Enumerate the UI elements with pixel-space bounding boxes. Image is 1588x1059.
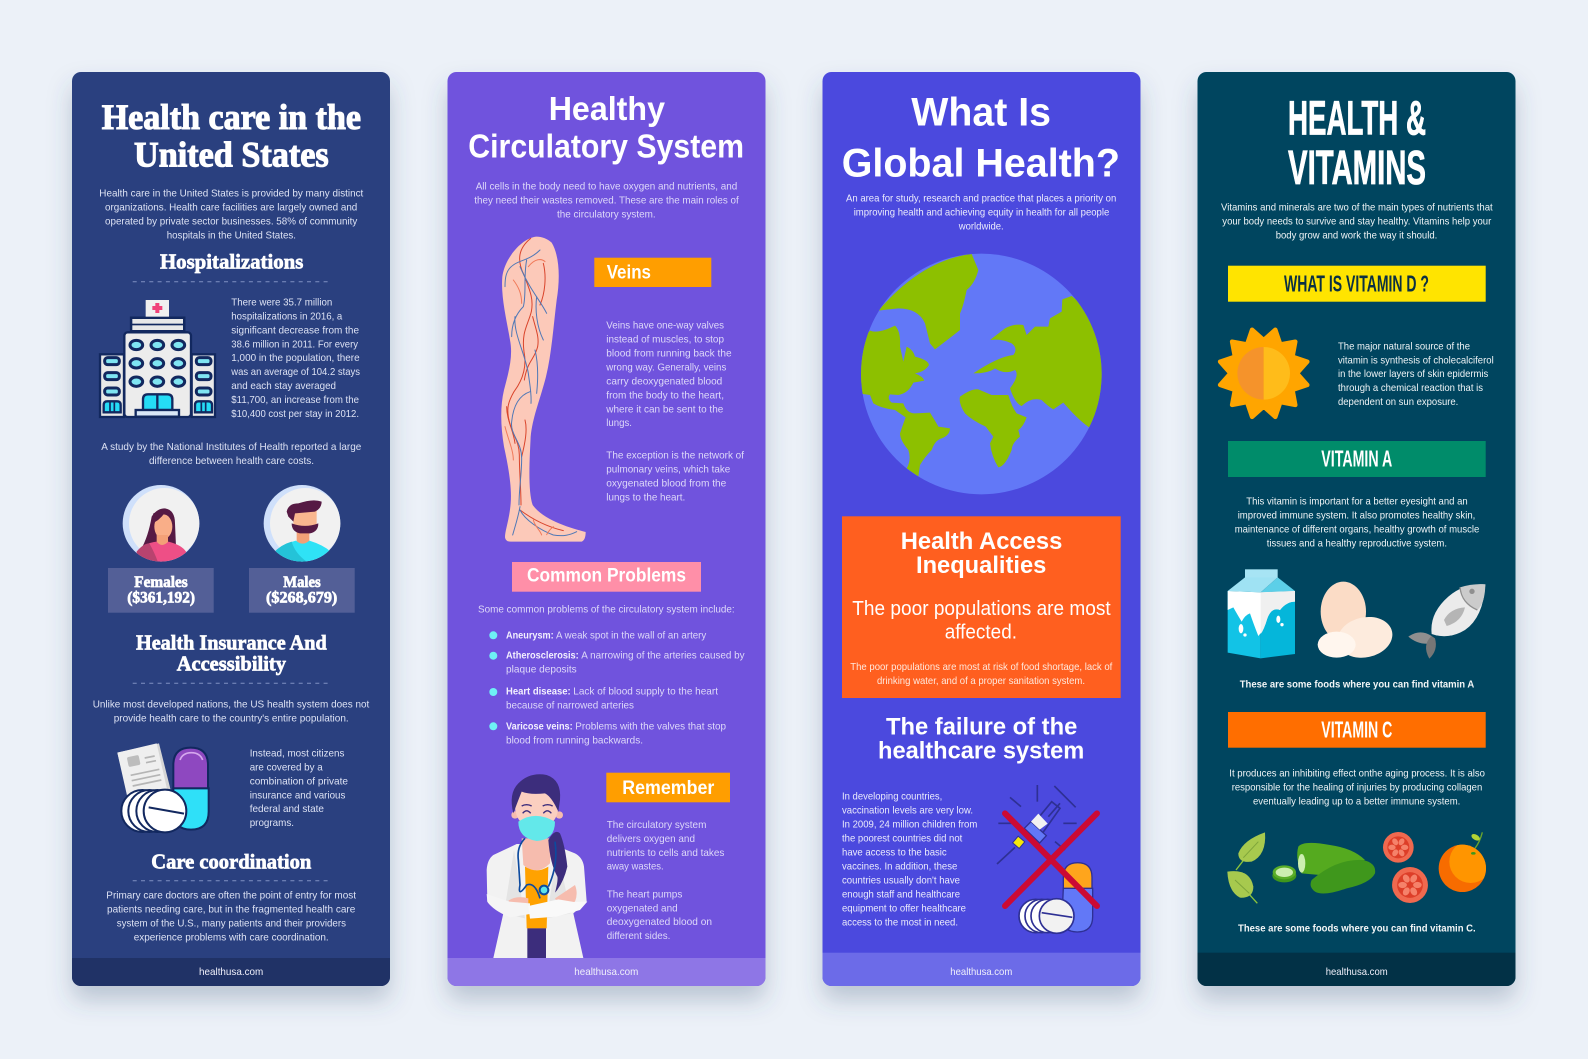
vitamin D text: dependent on sun exposure. [1338,396,1458,408]
veins text: lungs to the heart. [606,491,685,503]
stat box: females [108,568,214,613]
bullet list: blood from running backwards. [506,734,643,746]
icon: tomato slices [1383,832,1428,903]
intro text: hospitals in the United States. [167,230,296,242]
healthcare failure text: equipment to offer healthcare [842,902,966,914]
label: vitamin A [1228,441,1486,477]
icon: orange [1438,832,1486,892]
intro text: All cells in the body need to have oxygen and nutrients, and [476,181,737,193]
veins text: pulmonary veins, which take [606,463,730,475]
callout: health access inequalities: Inequalities [916,552,1046,579]
healthcare failure text: vaccines. In addition, these [842,860,957,872]
bullet list: Heart disease: [506,685,571,697]
insurance side text [250,747,348,829]
title: Circulatory System [468,128,744,165]
vitamin A text: maintenance of different organs, healthy growth of muscle [1235,523,1479,535]
vitamin A text [1235,495,1479,549]
remember text [607,819,724,942]
icon: eggs [1318,582,1396,663]
remember text: away wastes. [607,861,664,873]
care coordination text: system of the U.S., many patients and their providers [117,917,346,929]
panel footer bar [448,958,766,986]
insurance side text: combination of private [250,775,348,787]
veins text: oxygenated blood from the [606,477,726,489]
callout: health access inequalities: The poor populations are most at risk of food shortage, lack of [850,661,1112,673]
intro text: they need their wastes removed. These are the main roles of [474,195,739,207]
title: Global Health? [842,142,1120,186]
callout: health access inequalities: affected. [945,622,1017,644]
bullet list: A weak spot in the wall of an artery [556,630,707,642]
caption: vitamin C foods: These are some foods where you can find vitamin C. [1238,922,1476,934]
insurance side text: insurance and various [250,789,345,801]
icon: female avatar [123,485,200,563]
intro text: your body needs to survive and stay healthy. Vitamins help your [1222,215,1492,227]
illustration: globe [858,254,1108,494]
care coordination text [106,889,356,943]
label: what is vitamin D [1228,266,1486,302]
icon: crossed-out syringe and pills [997,785,1097,933]
title: Healthy [549,90,666,127]
vitamin A text: improved immune system. It also promotes healthy skin, [1238,509,1475,521]
insurance side text: federal and state [250,803,324,815]
illustration: leg with veins [501,237,586,542]
remember text: delivers oxygen and [607,833,695,845]
healthcare failure text: countries usually don't have [842,874,960,886]
heading: insurance: Health Insurance And [136,630,327,654]
title: What Is [911,91,1051,135]
stat box: males: Males [283,574,321,591]
heading: failure of the healthcare system: The failure of the [886,713,1077,740]
title: VITAMINS [1288,142,1426,195]
panel: health care in the United States [72,72,390,986]
callout: health access inequalities [842,516,1121,698]
intro text: organizations. Health care facilities are largely owned and [105,202,357,214]
stat box: males: ($268,679) [266,590,337,607]
vitamin C text: eventually leading up to a better immune system. [1253,795,1460,807]
label: what is vitamin D: WHAT IS VITAMIN D ? [1284,271,1429,297]
label: remember: Remember [622,778,715,799]
veins text: The exception is the network of [606,449,744,461]
title: Health care in the [102,97,361,137]
study text [101,441,361,467]
stat box: females: ($361,192) [127,590,195,607]
icon: male avatar [264,485,341,563]
veins text: blood from running back the [606,348,732,360]
heading: insurance [136,630,327,676]
panel: health and vitamins [1198,72,1516,987]
hospitalization text: significant decrease from the [231,324,359,336]
hospitalization text: 1,000 in the population, there [231,352,360,364]
veins text: instead of muscles, to stop [606,334,724,346]
label: vitamin A: VITAMIN A [1321,446,1392,472]
healthcare failure text: access to the most in need. [842,916,958,928]
bullet list: Varicose veins: [506,720,573,732]
bullet list: Lack of blood supply to the heart [573,685,718,697]
icon: milk carton [1228,569,1295,658]
icon: document, capsule and tablets [117,743,209,832]
intro text: body grow and work the way it should. [1276,229,1437,241]
title [1288,92,1426,195]
label: common problems [512,562,701,592]
study text: A study by the National Institutes of Health reported a large [101,441,361,453]
caption: vitamin A foods: These are some foods where you can find vitamin A [1240,679,1475,691]
vitamin C text: responsible for the healing of injuries by producing collagen [1232,781,1482,793]
label: veins [594,258,711,287]
intro text: Vitamins and minerals are two of the main types of nutrients that [1221,201,1493,213]
panel background [822,72,1140,986]
intro text: operated by private sector businesses. 58% of community [105,216,358,228]
remember text: The heart pumps [607,888,682,900]
vitamin D text [1338,340,1494,408]
study text: difference between health care costs. [149,455,314,467]
intro text: An area for study, research and practice that places a priority on [846,193,1116,205]
label: remember [606,773,730,802]
intro text [1221,201,1493,241]
hospitalization text: was an average of 104.2 stays [230,366,360,378]
remember text: deoxygenated blood on [607,916,712,928]
common problems lead-in: Some common problems of the circulatory system include: [478,604,735,616]
title [842,91,1120,186]
vitamin D text: through a chemical reaction that is [1338,382,1483,394]
label: vitamin C: VITAMIN C [1321,716,1392,742]
bullet list: Aneurysm: [506,630,554,642]
callout: health access inequalities: drinking water, and of a proper sanitation system. [877,675,1085,687]
heading: insurance: Accessibility [177,652,286,676]
panel footer bar: healthusa.com [574,966,639,978]
healthcare failure text: In developing countries, [842,791,942,803]
bullet list [489,630,745,746]
icon: cucumbers [1272,843,1375,894]
heading: failure of the healthcare system: healthcare system [878,737,1084,764]
icon: spinach leaves [1227,832,1265,903]
vitamin C text [1229,767,1485,807]
vitamin C text: It produces an inhibiting effect onthe aging process. It is also [1229,767,1485,779]
title [102,97,361,175]
panel background [448,72,766,986]
stat box: males [249,568,355,613]
stat box: females: Females [134,574,188,591]
vitamin A text: tissues and a healthy reproductive system. [1267,537,1447,549]
veins text: where it can be sent to the [605,403,723,415]
veins text: lungs. [606,417,632,429]
intro text: improving health and achieving equity in health for all people [854,207,1109,219]
label: common problems: Common Problems [527,566,686,587]
care coordination text: Primary care doctors are often the point of entry for most [106,889,356,901]
healthcare failure text: In 2009, 24 million children from [842,819,978,831]
panel: what is global health [822,72,1140,987]
remember text: The circulatory system [607,819,707,831]
intro text: Health care in the United States is provided by many distinct [99,188,363,200]
hospitalization text: hospitalizations in 2016, a [231,310,342,322]
panel: healthy circulatory system [448,72,766,986]
icon: sun [1220,330,1307,417]
panel footer bar [72,958,390,986]
heading: care coordination: Care coordination [151,850,312,874]
bullet list: because of narrowed arteries [506,699,634,711]
healthcare failure text: the poorest countries did not [842,833,962,845]
intro text: worldwide. [958,221,1004,233]
bullet list: plaque deposits [506,664,577,676]
hospitalization text: $10,400 cost per stay in 2012. [231,408,359,420]
vitamin A text: This vitamin is important for a better eyesight and an [1246,495,1468,507]
insurance side text: programs. [250,817,294,829]
bullet list: Atherosclerosis: [506,650,579,662]
panel footer bar: healthusa.com [950,966,1013,978]
callout: health access inequalities: The poor populations are most [852,598,1111,620]
healthcare failure text: have access to the basic [842,847,947,859]
hospitalization text: There were 35.7 million [231,296,332,308]
icon: hospital building [100,300,215,417]
title: HEALTH & [1288,92,1426,145]
healthcare failure text: vaccination levels are very low. [842,805,973,817]
icon: fish [1408,584,1485,659]
panel background [1198,72,1516,986]
panel footer bar: healthusa.com [199,966,264,978]
insurance intro text [93,698,369,724]
bullet list: Problems with the valves that stop [575,720,726,732]
intro text [474,181,739,221]
remember text: different sides. [607,930,670,942]
healthcare failure text [842,791,978,928]
vitamin D text: in the lower layers of skin epidermis [1338,368,1488,380]
callout: health access inequalities: Health Access [901,528,1062,555]
care coordination text: experience problems with care coordination. [134,931,329,943]
panel footer bar [1198,953,1516,987]
label: vitamin C [1228,712,1486,748]
hospitalization text: $11,700, an increase from the [231,394,359,406]
panel background [72,72,390,986]
title: United States [134,135,329,175]
insurance intro text: provide health care to the country's entire population. [114,712,349,724]
intro text [846,193,1116,233]
bullet list: A narrowing of the arteries caused by [581,650,745,662]
intro text: the circulatory system. [557,209,656,221]
heading: failure of the healthcare system [878,713,1084,764]
panel footer bar: healthusa.com [1326,966,1388,978]
veins text: wrong way. Generally, veins [605,362,726,374]
illustration: doctor with mask [487,774,587,958]
title [468,90,744,165]
hospitalization text: and each stay averaged [231,380,336,392]
heading: hospitalizations: Hospitalizations [160,250,303,274]
vitamin D text: The major natural source of the [1338,340,1470,352]
remember text: oxygenated and [607,902,678,914]
panel footer bar [822,953,1140,987]
insurance side text: Instead, most citizens [250,747,344,759]
hospitalization text [230,296,360,420]
healthcare failure text: enough staff and healthcare [842,888,960,900]
vitamin D text: vitamin is synthesis of cholecalciferol [1338,354,1494,366]
insurance side text: are covered by a [250,761,323,773]
hospitalization text: 38.6 million in 2011. For every [231,338,359,350]
intro text [99,188,363,242]
veins text [605,320,744,503]
care coordination text: patients needing care, but in the fragmented health care [107,903,355,915]
veins text: Veins have one-way valves [606,320,724,332]
insurance intro text: Unlike most developed nations, the US health system does not [93,698,369,710]
veins text: carry deoxygenated blood [606,375,722,387]
remember text: nutrients to cells and takes [607,847,724,859]
label: veins: Veins [607,262,651,283]
veins text: from the body to the heart, [606,389,724,401]
